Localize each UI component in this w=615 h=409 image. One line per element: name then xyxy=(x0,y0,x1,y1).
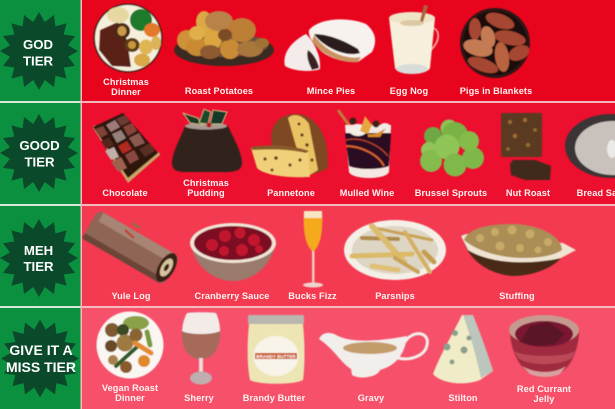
item: bucks fizz xyxy=(288,211,337,301)
label: Red Currant xyxy=(517,384,571,394)
item: mulled wine xyxy=(338,110,394,198)
badge: meh tier: MEH xyxy=(24,243,53,258)
item: pannetone xyxy=(251,114,328,198)
badge: good tier: GOOD xyxy=(19,138,60,153)
label: Chocolate xyxy=(102,188,148,198)
icon: parsnips plate xyxy=(344,220,446,280)
panel: give it a miss tier row xyxy=(0,308,615,409)
icon: chocolate box xyxy=(93,113,160,183)
badge: give it a miss tier xyxy=(1,320,79,398)
label: Brussel Sprouts xyxy=(415,188,487,198)
badge: god tier: TIER xyxy=(23,54,53,68)
badge: god tier xyxy=(0,12,78,90)
icon: mince pies xyxy=(284,19,375,71)
label: Stuffing xyxy=(499,291,535,301)
item: egg nog xyxy=(389,5,438,96)
badge: give it a miss tier: MISS TIER xyxy=(6,359,76,375)
icon: sherry glass xyxy=(182,312,220,384)
icon: pigs in blankets bowl xyxy=(460,8,532,78)
label: Parsnips xyxy=(375,291,415,301)
label: Dinner xyxy=(115,393,145,403)
label: Brandy Butter xyxy=(243,393,306,403)
badge: good tier xyxy=(0,114,78,192)
item: brussel sprouts xyxy=(415,120,487,198)
icon: vegan roast dinner plate xyxy=(96,312,164,378)
label: Vegan Roast xyxy=(102,383,158,393)
item: christmas dinner xyxy=(94,4,162,97)
label: Christmas xyxy=(183,178,229,188)
badge: good tier: TIER xyxy=(24,154,55,170)
icon: egg nog glass xyxy=(389,5,438,74)
icon: mulled wine glass xyxy=(338,110,391,178)
label: Cranberry Sauce xyxy=(194,291,270,301)
label: Roast Potatoes xyxy=(185,86,253,96)
label: Nut Roast xyxy=(506,188,550,198)
item: pigs in blankets xyxy=(460,8,532,96)
icon: christmas dinner plate xyxy=(94,4,162,72)
panel: meh tier row xyxy=(0,206,615,306)
badge: give it a miss tier: GIVE IT A xyxy=(9,342,73,358)
label: Yule Log xyxy=(111,291,151,301)
icon: roast potatoes dish xyxy=(174,11,274,66)
icon: cranberry sauce bowl xyxy=(190,223,276,281)
item: stilton xyxy=(433,315,493,403)
badge: meh tier xyxy=(0,219,78,297)
item: bread sauce xyxy=(565,114,615,198)
item: red currant jelly xyxy=(509,315,579,404)
label: Bucks Fizz xyxy=(288,291,337,301)
item: parsnips xyxy=(344,220,446,301)
item: yule log xyxy=(82,210,181,301)
label: Mince Pies xyxy=(307,86,355,96)
item: brandy butter xyxy=(243,315,306,403)
label: Sherry xyxy=(184,393,215,403)
item: gravy xyxy=(319,333,427,403)
item: stuffing xyxy=(461,224,576,301)
label: Dinner xyxy=(111,87,141,97)
icon: stilton wedge xyxy=(433,315,493,383)
label: Stilton xyxy=(448,393,478,403)
label: Egg Nog xyxy=(390,86,428,96)
badge: god tier: GOD xyxy=(23,37,53,52)
item: chocolate xyxy=(93,113,160,198)
panel: good tier row xyxy=(0,103,615,204)
item: cranberry sauce xyxy=(190,223,276,301)
item: mince pies xyxy=(284,19,375,96)
item: roast potatoes xyxy=(174,11,274,96)
label: Pudding xyxy=(187,188,225,198)
label: Jelly xyxy=(534,394,555,404)
badge: meh tier: TIER xyxy=(23,259,54,274)
icon: red currant jelly bowl xyxy=(509,315,579,377)
item: vegan roast dinner xyxy=(96,312,164,403)
panel: god tier row xyxy=(0,0,615,101)
icon: brandy butter jar: BRANDY BUTTER xyxy=(256,354,296,359)
label: Pannetone xyxy=(267,188,315,198)
icon: nut roast xyxy=(501,113,551,180)
icon: pannetone xyxy=(251,114,328,177)
icon: brussel sprouts xyxy=(420,120,484,176)
label: Pigs in Blankets xyxy=(460,86,532,96)
icon: gravy boat xyxy=(319,333,427,377)
icon: bread sauce bowl xyxy=(565,114,615,178)
icon: stuffing dish xyxy=(461,224,576,276)
item: nut roast xyxy=(501,113,551,198)
label: Mulled Wine xyxy=(340,188,394,198)
item: christmas pudding xyxy=(172,109,242,198)
icon: christmas pudding xyxy=(172,109,242,172)
item: sherry xyxy=(182,312,220,403)
icon: bucks fizz flute xyxy=(303,211,323,288)
icon: yule log xyxy=(82,210,181,286)
label: Gravy xyxy=(358,393,385,403)
label: Christmas xyxy=(103,77,149,87)
